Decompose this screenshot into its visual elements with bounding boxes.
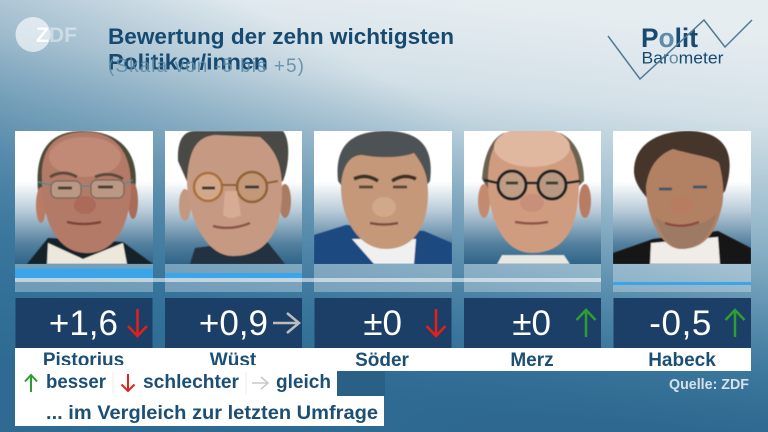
values: +1,6 [49, 304, 118, 343]
values: ±0 [512, 304, 551, 343]
bar chart: ratings [15, 264, 751, 292]
legend icon: down arrow [122, 374, 134, 391]
photo: Merz [464, 131, 601, 264]
legend labels: besser [46, 372, 107, 393]
title: Bewertung der zehn wichtigsten [108, 24, 454, 49]
names: Habeck [648, 350, 716, 371]
logo: Politbarometer [608, 20, 752, 79]
values [49, 304, 712, 343]
photo: Habeck [613, 131, 751, 264]
legend labels: schlechter [143, 372, 240, 393]
legend [15, 365, 385, 426]
logo: Politbarometer: Barometer [642, 48, 724, 68]
logo: ZDF: ZDF [36, 24, 77, 47]
value boxes [16, 298, 751, 348]
values: +0,9 [199, 304, 268, 343]
photo: Pistorius [15, 131, 153, 264]
subtitle: (Skala von -5 bis +5) [108, 56, 304, 77]
names: Wüst [210, 350, 257, 371]
logo: Politbarometer: Polit [641, 23, 698, 53]
names: Pistorius [43, 350, 124, 371]
logo: ZDF [16, 17, 77, 52]
legend labels: gleich [276, 372, 331, 393]
names: Merz [510, 350, 554, 371]
title: Politiker/innen [108, 50, 268, 74]
names: Söder [355, 350, 410, 371]
name strip [15, 348, 751, 371]
photo: Wüst [165, 131, 302, 264]
source: Quelle: ZDF [669, 376, 749, 393]
legend labels [46, 372, 378, 424]
values: -0,5 [649, 304, 712, 343]
trend arrows [128, 309, 744, 337]
values: ±0 [363, 304, 402, 343]
legend labels: ... im Vergleich zur letzten Umfrage [46, 403, 378, 424]
photo: Söder [314, 131, 452, 264]
legend icon: up arrow [25, 375, 37, 392]
names [43, 350, 716, 371]
legend icon: right arrow [252, 377, 268, 389]
